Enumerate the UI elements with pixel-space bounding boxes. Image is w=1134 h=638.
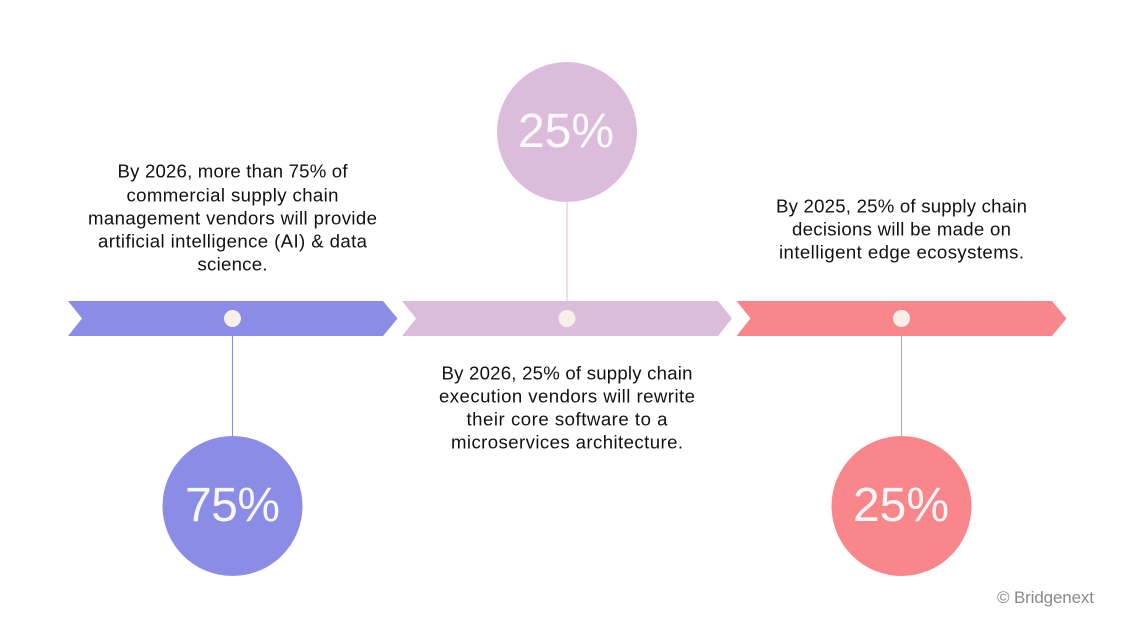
- circle: 25% pink: 25%: [518, 105, 614, 158]
- text block: 75% description: management vendors will provide: [88, 208, 377, 228]
- circle: 75%: 75%: [185, 479, 280, 532]
- connector line: coral: [900, 318, 902, 440]
- arrow segment: coral: [736, 301, 1066, 336]
- circle: 25% coral: [832, 436, 972, 576]
- circle: 25% coral: 25%: [853, 479, 949, 532]
- circle: 75%: [162, 436, 302, 576]
- timeline dot: purple: [224, 310, 241, 327]
- panel: 25% edge milestone: [736, 196, 1066, 576]
- panel: 75% milestone: [68, 160, 398, 576]
- text block: 25% execution description: By 2026, 25% of supply chain: [442, 362, 692, 384]
- text block: 25% execution description: microservices architecture.: [451, 432, 683, 452]
- text block: 75% description: science.: [198, 254, 268, 274]
- text block: 25% edge description: intelligent edge ecosystems.: [779, 242, 1024, 262]
- panel: 25% execution milestone: [402, 62, 732, 452]
- text block: 25% execution description: their core software to a: [466, 408, 668, 430]
- connector line: 75%: [232, 318, 234, 440]
- text block: 75% description: [88, 160, 377, 274]
- timeline dot: coral: [893, 310, 910, 327]
- copyright note: © Bridgenext: [997, 588, 1094, 607]
- text block: 25% execution description: execution vendors will rewrite: [439, 386, 695, 406]
- text block: 25% edge description: decisions will be made on: [792, 218, 1011, 240]
- text block: 25% edge description: By 2025, 25% of supply chain: [776, 196, 1027, 216]
- arrow segment: purple: [68, 301, 398, 336]
- arrow segment: pink: [402, 301, 732, 336]
- text block: 75% description: By 2026, more than 75% of: [118, 160, 348, 182]
- text block: 75% description: artificial intelligence (AI) & data: [98, 230, 368, 252]
- circle: 25% pink: [497, 62, 637, 202]
- text block: 25% edge description: [776, 196, 1027, 262]
- text block: 75% description: commercial supply chain: [126, 184, 338, 206]
- text block: 25% execution description: [439, 362, 695, 452]
- timeline dot: pink: [558, 310, 576, 327]
- connector line: pink: [566, 195, 568, 318]
